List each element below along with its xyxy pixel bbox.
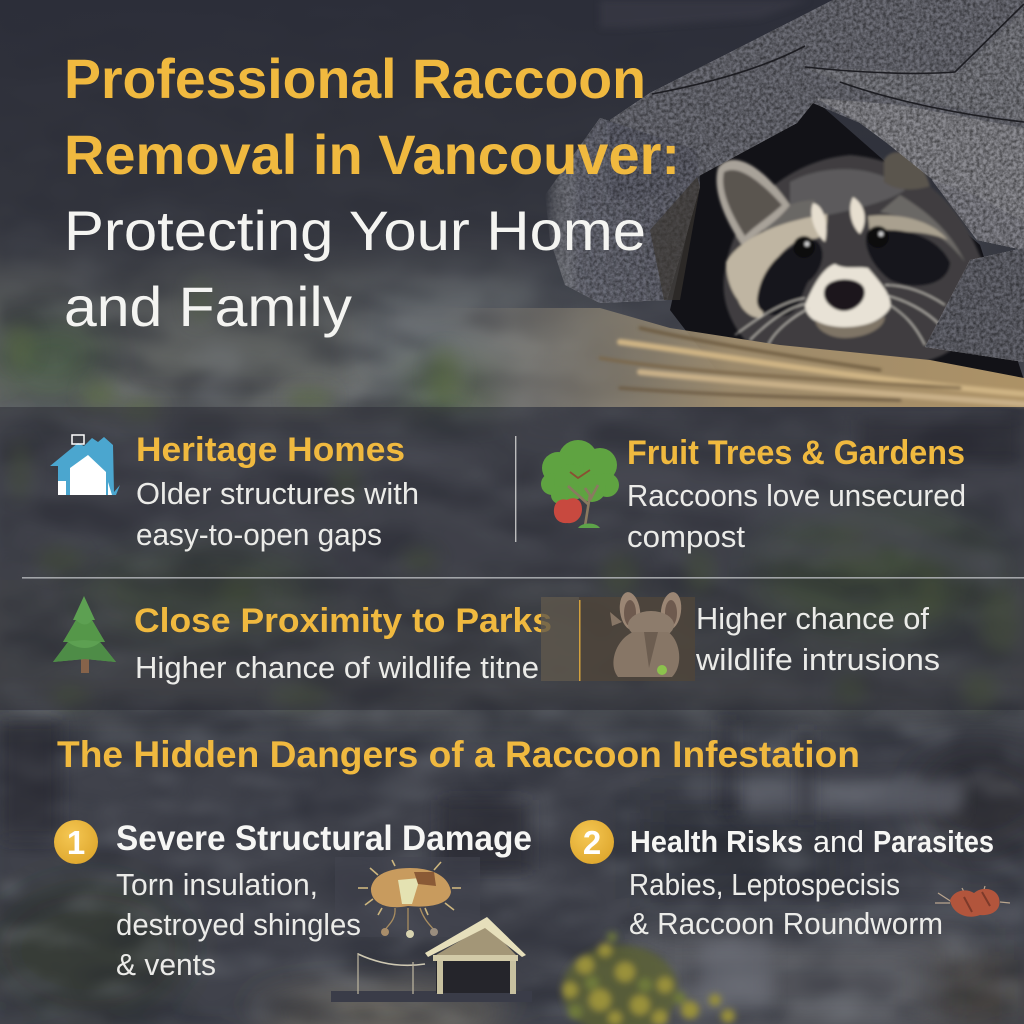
raccoon [717, 152, 985, 366]
feature: wildlife intrusions: Higher chance of [696, 601, 929, 636]
danger 1: structural damage: Severe Structural Damage [116, 819, 532, 858]
feature: heritage homes [50, 431, 419, 552]
nose [824, 279, 865, 311]
feature: heritage homes: Heritage Homes [136, 431, 405, 469]
black eye mask [757, 240, 823, 316]
main title: Removal in Vancouver: [64, 123, 680, 186]
hero photo: raccoon under damaged roof shingles [440, 0, 1024, 407]
pale cheek and brow fur [726, 214, 827, 318]
icon: parasite cluster [935, 886, 1010, 917]
wooden beam [440, 308, 1024, 407]
main title: Professional Raccoon [64, 47, 646, 110]
yellow foliage in foreground [562, 932, 735, 1024]
whiskers [735, 285, 945, 345]
danger 1: structural damage: Torn insulation, [116, 867, 318, 902]
chin [815, 316, 885, 338]
danger 2: health risks: and [813, 824, 864, 859]
icon: damaged insulation burst [335, 857, 480, 938]
background foliage flecks [6, 278, 1020, 708]
number badge 1: 1 [67, 824, 85, 861]
icon: miniature house with clothesline [331, 917, 532, 1002]
danger 1: structural damage: destroyed shingles [116, 907, 361, 942]
feature: close proximity to parks: Close Proximity to Parks [134, 602, 552, 640]
icon: brown animal tile [541, 591, 695, 681]
section heading: hidden dangers: The Hidden Dangers of a Raccoon Infestation [57, 734, 860, 775]
panel: why Vancouver homes attract raccoons [0, 407, 1024, 710]
right ear [884, 152, 930, 189]
danger 1: structural damage [54, 819, 532, 1002]
shingle edge cracks [652, 4, 1024, 122]
icon: apple tree [541, 440, 619, 528]
feature: fruit trees and gardens [541, 434, 966, 554]
danger 2: health risks: Parasites [873, 824, 994, 859]
slate roof streaks behind the band [120, 455, 1024, 1010]
body and head fur [724, 155, 985, 366]
main title: and Family [64, 275, 352, 338]
feature: wildlife intrusions [541, 591, 940, 681]
feature: heritage homes: Older structures with [136, 476, 419, 511]
white muzzle [805, 264, 890, 328]
feature: close proximity to parks: Higher chance of wildlife titne [135, 650, 539, 685]
number badge 2: 2 [583, 824, 601, 861]
danger 2: health risks: Health Risks [630, 824, 803, 859]
feature: fruit trees and gardens: Raccoons love unsecured [627, 478, 966, 513]
main title [64, 47, 680, 338]
feature: heritage homes: easy-to-open gaps [136, 517, 382, 552]
feature: wildlife intrusions: wildlife intrusions [695, 642, 940, 677]
dark torn wood under shingle [650, 177, 700, 300]
danger 2: health risks: & Raccoon Roundworm [629, 906, 943, 941]
icon: evergreen tree [53, 596, 116, 673]
feature: fruit trees and gardens: Fruit Trees & Gardens [627, 434, 965, 472]
feature: fruit trees and gardens: compost [627, 519, 745, 554]
icon: blue house [50, 435, 120, 495]
feature: close proximity to parks [53, 596, 552, 685]
wall above the roof [600, 0, 810, 28]
danger 2: health risks [570, 820, 1010, 941]
number badge 1 [54, 820, 98, 864]
danger 1: structural damage: & vents [116, 947, 216, 982]
eyes [793, 236, 815, 258]
roof shingles [545, 0, 1024, 362]
cavity under the roof [670, 100, 1024, 380]
forehead stripes [811, 203, 826, 242]
number badge 2 [570, 820, 614, 864]
danger 2: health risks: Rabies, Leptospecisis [629, 867, 900, 902]
left ear [717, 160, 790, 245]
main title: Protecting Your Home [64, 199, 646, 262]
